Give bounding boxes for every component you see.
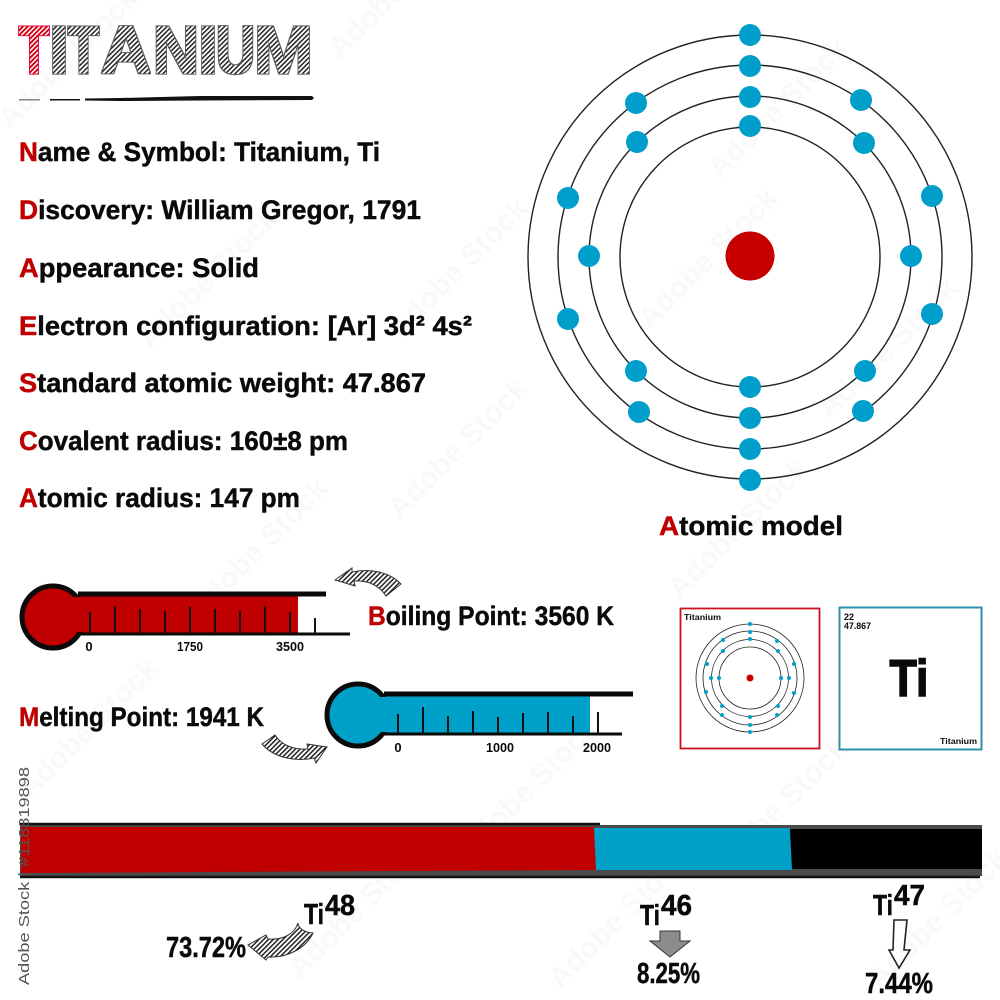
melting point thermometer: 2000 xyxy=(583,740,611,755)
text block: element facts: Name & Symbol: Titanium, Ti xyxy=(19,137,380,167)
segment: Ti47 xyxy=(790,829,982,869)
isotope Ti46 label: 46 xyxy=(661,890,692,922)
melting point label: Melting Point: 1941 K xyxy=(19,702,264,732)
boiling point thermometer xyxy=(22,586,350,654)
card: Titanium atom: Titanium xyxy=(684,612,721,622)
atomic model label: Atomic model xyxy=(659,511,843,541)
boiling point thermometer: 3500 xyxy=(276,639,304,654)
title underline xyxy=(19,96,314,101)
watermark pattern: Adobe Stock xyxy=(702,732,855,885)
segment: Ti48 xyxy=(21,827,596,873)
isotope Ti48 label: 48 xyxy=(325,890,355,922)
boiling point label: Boiling Point: 3560 K xyxy=(368,601,614,631)
boiling point thermometer: 0 xyxy=(85,639,93,654)
watermark pattern: Adobe Stock xyxy=(812,272,965,425)
arrow: Ti46 xyxy=(650,931,690,957)
isotope Ti47 label: 47 xyxy=(894,880,925,912)
watermark pattern: Adobe Stock xyxy=(542,842,695,995)
text block: element facts: Electron configuration: [Ar] 3d² 4s² xyxy=(19,311,472,341)
title: T xyxy=(68,13,99,88)
title xyxy=(19,13,313,88)
arrow: Ti47 xyxy=(889,920,910,968)
value 7.44%: 7.44% xyxy=(865,968,933,1000)
melting point thermometer xyxy=(327,684,633,755)
card: periodic table tile: 22 xyxy=(844,612,854,622)
watermark pattern: Adobe Stock xyxy=(182,472,335,625)
boiling point thermometer: 1750 xyxy=(177,639,203,654)
isotope Ti46 label xyxy=(640,890,692,932)
card: periodic table tile xyxy=(840,608,982,750)
isotope abundance bar xyxy=(20,824,982,877)
arrow: boiling point xyxy=(335,568,401,596)
text block: element facts xyxy=(19,137,472,513)
arrow: Ti48 xyxy=(248,923,313,960)
title: U xyxy=(216,13,255,88)
text block: element facts: Atomic radius: 147 pm xyxy=(19,483,300,513)
electrons xyxy=(557,24,943,491)
watermark pattern: Adobe Stock xyxy=(452,712,605,865)
card: periodic table tile: Titanium xyxy=(940,736,977,746)
value 73.72%: 73.72% xyxy=(166,932,246,964)
watermark pattern: Adobe Stock xyxy=(632,182,785,335)
text block: element facts: Discovery: William Gregor, 1791 xyxy=(19,195,421,225)
text block: element facts: Standard atomic weight: 47.867 xyxy=(19,368,426,398)
text block: element facts: Covalent radius: 160±8 pm xyxy=(19,426,348,456)
isotope Ti47 label xyxy=(873,880,925,922)
atomic model diagram xyxy=(528,24,972,491)
value 8.25%: 8.25% xyxy=(637,958,700,990)
watermark pattern: Adobe Stock xyxy=(662,452,815,605)
nucleus xyxy=(726,232,774,280)
segment: Ti46 xyxy=(594,828,792,870)
isotope Ti48 label xyxy=(304,890,355,931)
title: T xyxy=(19,13,49,88)
card: Titanium atom xyxy=(680,608,820,748)
isotope Ti47 label: Ti xyxy=(873,890,893,922)
isotope Ti46 label: Ti xyxy=(640,900,660,932)
card: periodic table tile: 47.867 xyxy=(844,621,871,631)
watermark pattern: Adobe Stock xyxy=(132,202,285,355)
title: M xyxy=(254,13,313,88)
melting point thermometer: 1000 xyxy=(486,740,514,755)
watermark pattern: Adobe Stock xyxy=(702,32,855,185)
title: I xyxy=(49,13,69,88)
text block: element facts: Appearance: Solid xyxy=(19,253,259,283)
title: N xyxy=(153,13,199,88)
watermark: stock id: Adobe Stock | #118819898 xyxy=(16,767,33,985)
watermark pattern: Adobe Stock xyxy=(12,652,165,805)
watermark pattern: Adobe Stock xyxy=(382,192,535,345)
watermark pattern: Adobe Stock xyxy=(382,372,535,525)
title: I xyxy=(198,13,218,88)
watermark pattern: Adobe Stock xyxy=(282,832,435,985)
isotope Ti48 label: Ti xyxy=(304,899,324,931)
melting point thermometer: 0 xyxy=(394,740,402,755)
arrow: melting point xyxy=(262,735,327,763)
title: A xyxy=(101,13,151,88)
card: periodic table tile: Ti xyxy=(890,650,928,708)
